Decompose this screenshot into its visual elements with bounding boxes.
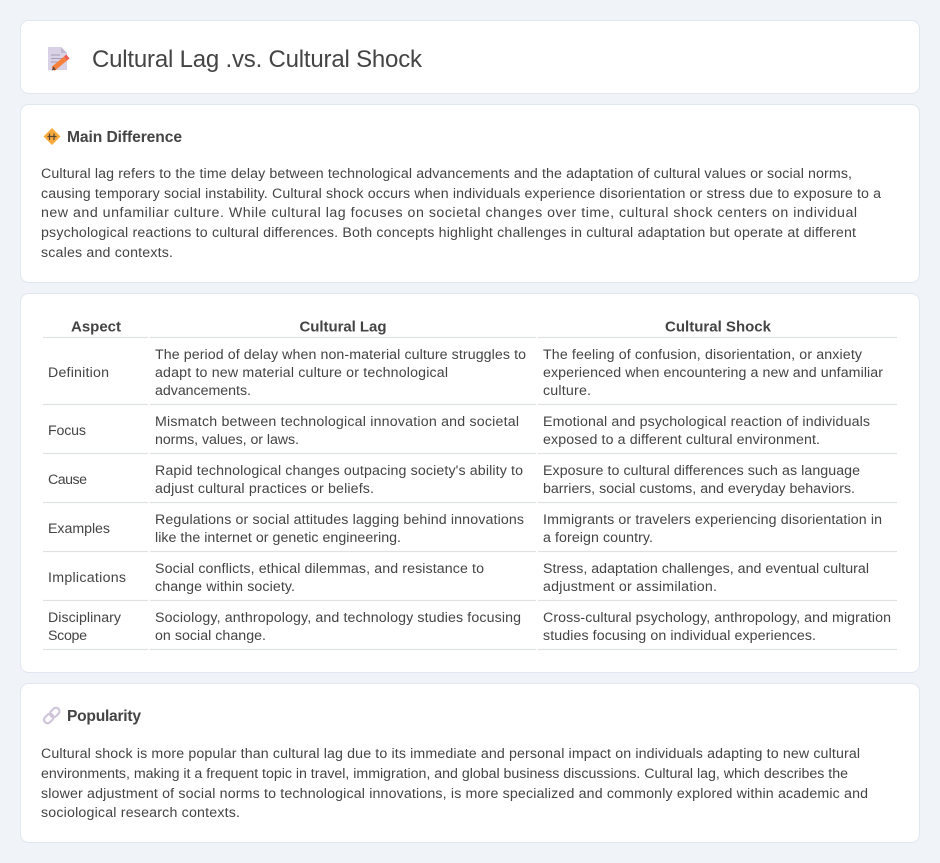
table row: disciplinary scope: Scope <box>48 628 87 644</box>
table header: Aspect <box>71 318 121 336</box>
table row: definition <box>48 347 883 399</box>
table row: definition: experienced when encountering a new and unfamiliar <box>543 365 883 381</box>
table row: examples: Immigrants or travelers experiencing disorientation in <box>543 512 882 528</box>
table row: cause: adjust cultural practices or beliefs. <box>155 481 374 497</box>
table header <box>71 318 772 336</box>
table row: disciplinary scope: Cross-cultural psychology, anthropology, and migration <box>543 610 891 626</box>
table row: implications <box>48 561 869 595</box>
table row: implications: Social conflicts, ethical dilemmas, and resistance to <box>155 561 484 577</box>
table row: examples: a foreign country. <box>543 530 653 546</box>
table row: disciplinary scope <box>48 610 891 644</box>
heading: main difference: Main Difference <box>67 129 182 146</box>
table row: focus <box>48 414 870 448</box>
table header: Cultural Shock <box>665 318 772 336</box>
table row: cause: Cause <box>48 472 87 488</box>
panel: popularity <box>20 684 920 842</box>
table row: implications: change within society. <box>155 579 295 595</box>
table row: examples: Regulations or social attitudes lagging behind innovations <box>155 512 524 528</box>
text block: popularity body <box>41 746 868 821</box>
text block: main difference body: causing temporary social instability. Cultural shock occurs when individuals experience disorientation or stress due to exposure to a <box>41 186 881 202</box>
table row: focus: exposed to a different cultural environment. <box>543 432 820 448</box>
table row: cause <box>48 463 860 497</box>
table row: disciplinary scope: studies focusing on individual experiences. <box>543 628 816 644</box>
text block: popularity body: environments, making it a frequent topic in travel, immigration, and global business discussions. Cultural lag, which describes the <box>41 766 848 782</box>
text block: popularity body: Cultural shock is more popular than cultural lag due to its immediate and personal impact on individuals adapting to new cultural <box>41 746 860 762</box>
table row: cause: Rapid technological changes outpacing society's ability to <box>155 463 523 479</box>
text block: main difference body: psychological reactions to cultural differences. Both concepts highlight challenges in cultural adaptation but operate at different <box>41 225 856 241</box>
icon: chain link <box>43 706 61 725</box>
text block: main difference body <box>41 166 881 261</box>
icon: document with pencil <box>48 47 68 70</box>
table row: examples <box>48 512 882 546</box>
table row: focus: norms, values, or laws. <box>155 432 299 448</box>
text block: main difference body: Cultural lag refers to the time delay between technological advancements and the adaptation of cultural values or social norms, <box>41 166 852 182</box>
text block: popularity body: sociological research contexts. <box>41 805 240 821</box>
table row: definition: The period of delay when non-material culture struggles to <box>155 347 526 363</box>
text block: main difference body: new and unfamiliar culture. While cultural lag focuses on societal changes over time, cultural shock centers on individual <box>41 205 857 221</box>
panel: title card <box>20 20 920 94</box>
table row: examples: Examples <box>48 521 110 537</box>
table row: implications: Implications <box>48 570 126 586</box>
panel: comparison table <box>20 294 920 672</box>
table row: cause: Exposure to cultural differences such as language <box>543 463 860 479</box>
table row: cause: barriers, social customs, and everyday behaviors. <box>543 481 855 497</box>
table row: disciplinary scope: Sociology, anthropology, and technology studies focusing <box>155 610 521 626</box>
table row: disciplinary scope: Disciplinary <box>48 610 122 626</box>
text block: popularity body: slower adjustment of social norms to technological innovations, is more specialized and commonly explored within academic and <box>41 786 868 802</box>
table row: focus: Focus <box>48 423 86 439</box>
table row: focus: Mismatch between technological innovation and societal <box>155 414 519 430</box>
table row: definition: Definition <box>48 365 109 381</box>
table row: definition: advancements. <box>155 383 251 399</box>
table row: examples: like the internet or genetic engineering. <box>155 530 401 546</box>
table row: focus: Emotional and psychological reaction of individuals <box>543 414 870 430</box>
icon: diamond warning sign <box>44 128 60 145</box>
table row: definition: culture. <box>543 383 591 399</box>
table row: definition: adapt to new material culture or technological <box>155 365 448 381</box>
text block: main difference body: scales and contexts. <box>41 245 173 261</box>
panel: main difference <box>20 104 920 282</box>
table row: disciplinary scope: on social change. <box>155 628 266 644</box>
table row: implications: adjustment or assimilation. <box>543 579 717 595</box>
table row: definition: The feeling of confusion, disorientation, or anxiety <box>543 347 863 363</box>
title: Cultural Lag .vs. Cultural Shock <box>92 46 423 73</box>
table header: Cultural Lag <box>300 318 386 336</box>
heading: popularity: Popularity <box>67 708 141 725</box>
table row: implications: Stress, adaptation challenges, and eventual cultural <box>543 561 869 577</box>
